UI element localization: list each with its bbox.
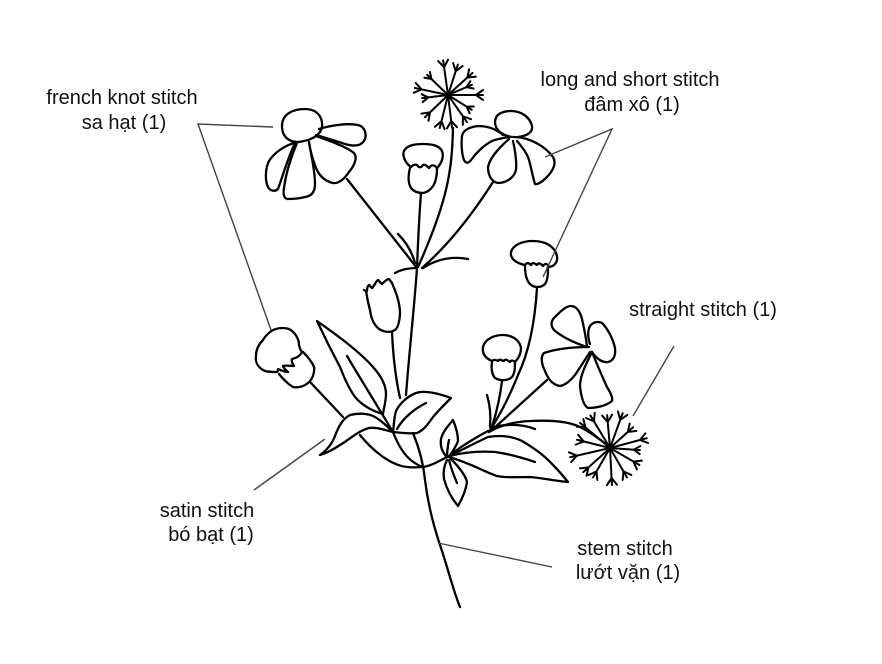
- bud cap: [483, 335, 521, 362]
- leaf: lower left: [320, 414, 393, 455]
- bud cup: [279, 352, 314, 387]
- leaf: small down: [444, 459, 467, 506]
- stem: lower left bud: [311, 383, 343, 417]
- main upper stem: [406, 268, 417, 395]
- bud: lower left: [256, 328, 314, 387]
- stem: lower main: [413, 433, 460, 607]
- dandelion: top: [414, 60, 483, 129]
- bud: right upper: [511, 241, 557, 287]
- stem: tulip: [392, 332, 400, 398]
- leaf: large right: [449, 436, 568, 482]
- label: lướt vặn: lướt vặn (1): [576, 562, 680, 584]
- flower: right: [542, 306, 615, 408]
- leader lines: long and short: [543, 129, 612, 277]
- stem: right daisy: [422, 182, 493, 268]
- bud cap: [256, 328, 302, 372]
- label: bó bạt: bó bạt (1): [168, 524, 254, 546]
- leaves: [317, 321, 568, 506]
- flower head: [282, 109, 322, 142]
- label: french knot stitch: french knot stitch: [46, 87, 198, 109]
- bud: tulip: [364, 279, 400, 332]
- petal: right: [588, 322, 615, 362]
- petal: top: [552, 306, 587, 347]
- petal: left: [542, 347, 590, 386]
- petal: left: [266, 143, 295, 191]
- bud cup: [492, 362, 515, 380]
- petal: lower right: [580, 352, 612, 408]
- leader lines: french knot: [198, 124, 273, 330]
- label: đâm xô: đâm xô (1): [584, 94, 680, 116]
- petal: right: [516, 137, 554, 184]
- flower: top right daisy: [462, 111, 554, 184]
- leaf vein: [347, 356, 393, 432]
- leaf: small up: [441, 420, 458, 457]
- dandelion: right: [569, 412, 648, 485]
- leaf vein: [447, 440, 449, 457]
- leaf vein: [449, 452, 535, 462]
- petal: right: [316, 124, 366, 146]
- petal: lower middle: [284, 142, 315, 199]
- leaf: large left: [317, 321, 386, 414]
- stem: top bud: [417, 193, 421, 267]
- stem: right flower: [492, 380, 547, 430]
- stems: [311, 128, 606, 607]
- label: satin stitch: satin stitch: [160, 500, 254, 522]
- stem: right dandelion: [489, 421, 606, 444]
- bud: top centre: [403, 144, 443, 193]
- stem: lower centre bud: [492, 381, 502, 427]
- label: straight stitch: straight stitch (1): [629, 299, 777, 321]
- label: stem stitch: stem stitch: [577, 538, 673, 560]
- leaf vein: [449, 460, 457, 483]
- label: long and short stitch: long and short stitch: [540, 69, 720, 91]
- stem: right upper bud: [490, 288, 537, 430]
- twig: right branch: [493, 425, 535, 429]
- label: sa hạt: sa hạt (1): [82, 112, 166, 134]
- petal: left: [462, 126, 509, 163]
- leaf vein: [397, 403, 426, 429]
- leaf: centre: [393, 392, 451, 433]
- twigs at top node: [395, 234, 468, 273]
- bud cup: [409, 168, 437, 193]
- bud: lower centre: [483, 335, 521, 380]
- branching stems at base: [360, 432, 447, 467]
- bud cap: [511, 241, 557, 267]
- double stem to junction: [449, 431, 488, 456]
- bud cap: [403, 144, 443, 168]
- flower head: [495, 111, 532, 137]
- twig: [487, 395, 490, 427]
- petal: middle: [488, 139, 516, 183]
- leader line: stem: [438, 543, 552, 567]
- flower: top left daisy: [266, 109, 366, 199]
- leader line: satin: [254, 439, 325, 490]
- petal: lower right: [309, 136, 356, 183]
- stem: top dandelion: [418, 128, 453, 267]
- bud cup: [525, 266, 548, 287]
- leader line: straight: [633, 346, 674, 416]
- stem: left daisy: [347, 179, 417, 268]
